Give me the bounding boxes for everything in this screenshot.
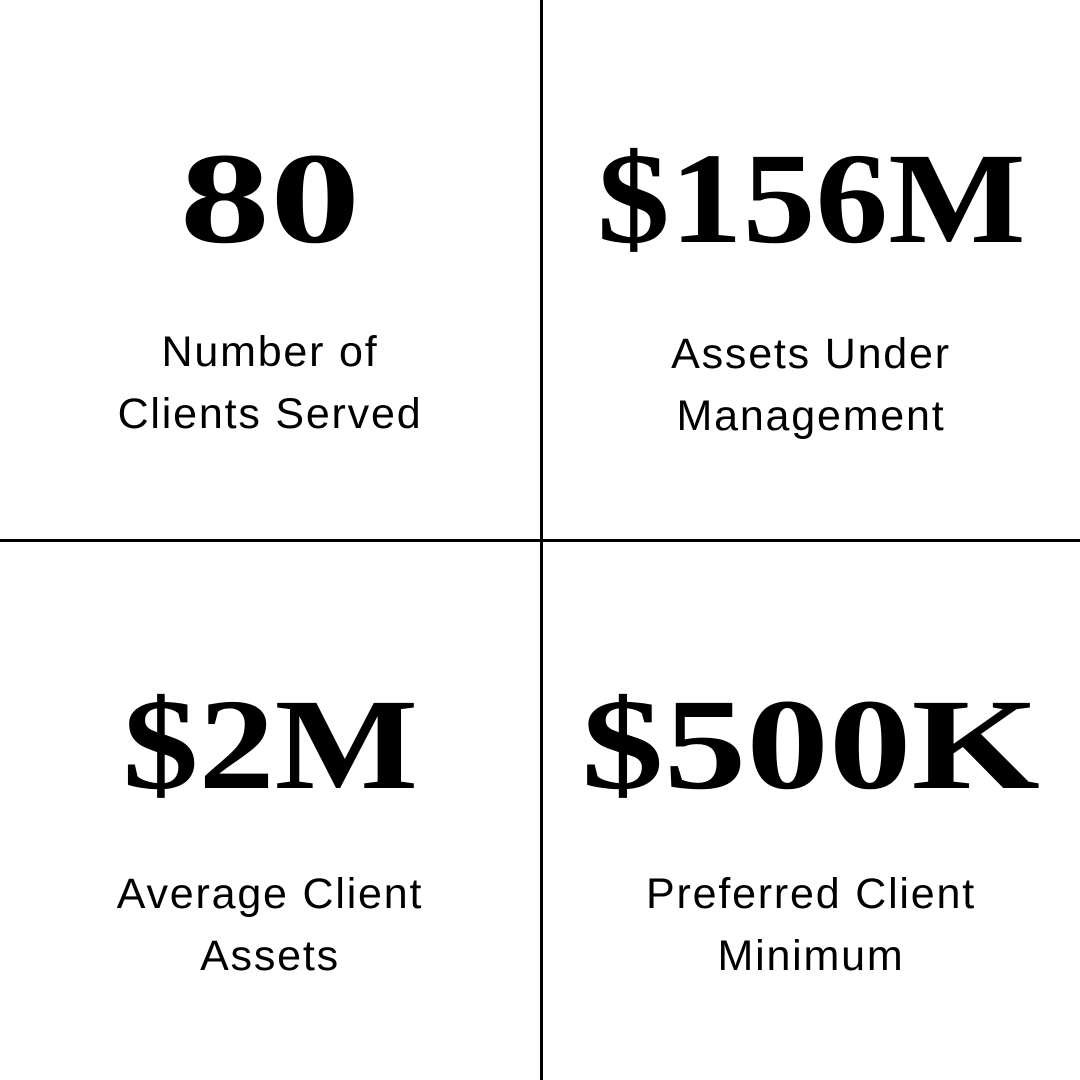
label: assets under management	[671, 330, 951, 440]
label: number of clients served: Number of	[162, 328, 378, 376]
number: $156M: $156M	[597, 127, 1025, 271]
label: preferred client minimum	[646, 870, 976, 980]
label: preferred client minimum: Minimum	[718, 932, 904, 980]
label: average client assets: Assets	[200, 932, 340, 980]
label: number of clients served	[118, 328, 422, 438]
label: assets under management: Assets Under	[671, 330, 951, 378]
number: $2M: $2M	[122, 673, 418, 817]
label: number of clients served: Clients Served	[118, 390, 422, 438]
label: preferred client minimum: Preferred Client	[646, 870, 976, 918]
label: assets under management: Management	[676, 392, 946, 440]
number: 80: 80	[180, 127, 360, 271]
label: average client assets	[116, 870, 423, 980]
number: $500K: $500K	[582, 673, 1040, 817]
label: average client assets: Average Client	[117, 870, 423, 918]
